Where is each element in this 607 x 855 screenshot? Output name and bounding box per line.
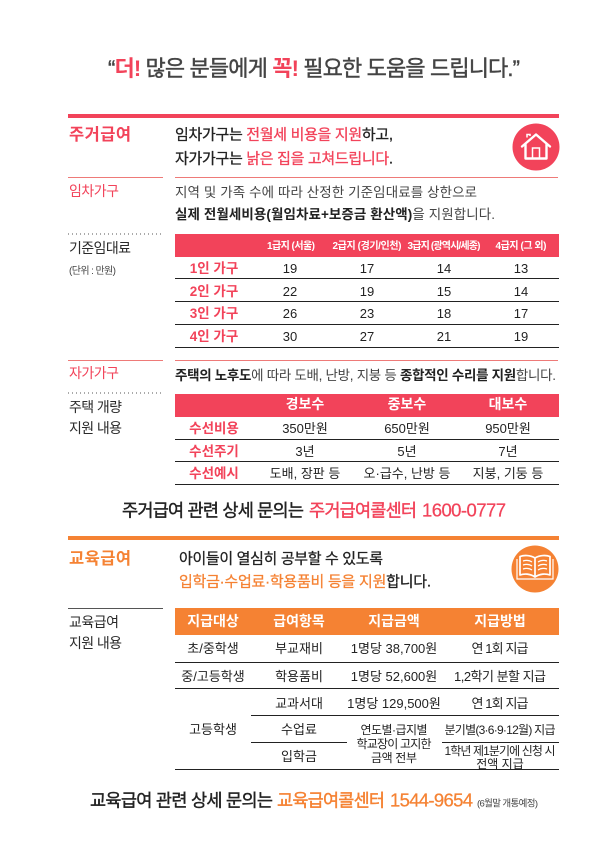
- table: repair support: 경보수: [286, 396, 324, 412]
- label: renter households: 임차가구: [69, 183, 119, 199]
- callout: housing contact: 1600-0777: [422, 500, 506, 520]
- label: education support: 지원 내용: [69, 635, 122, 651]
- table: base rent: 19: [514, 329, 528, 344]
- table: education support: 수업료: [281, 722, 317, 737]
- text block: housing summary: 자가가구는 낡은 집을 고쳐드립니다.: [175, 150, 393, 168]
- table: education support: 교과서대: [275, 696, 323, 711]
- table: education support: 분기별(3·6·9·12월) 지급: [444, 723, 556, 737]
- table: education support: [175, 608, 559, 771]
- table: education support: 지급대상: [187, 613, 239, 629]
- table: base rent: 2인 가구: [190, 284, 238, 299]
- table: base rent: 4급지 (그 외): [496, 240, 546, 252]
- table: base rent: 23: [360, 306, 374, 321]
- label: repair support: 지원 내용: [69, 420, 122, 436]
- table: education support: 연도별·급지별: [360, 723, 428, 737]
- table: base rent: 21: [437, 329, 451, 344]
- table: education support: 1학년 제1분기에 신청 시: [444, 744, 556, 758]
- table: education support: 부교재비: [275, 641, 323, 656]
- table: repair support: [175, 394, 559, 484]
- table: base rent: 14: [437, 261, 451, 276]
- label: repair support: 주택 개량: [69, 399, 122, 415]
- table: base rent: 19: [360, 284, 374, 299]
- table: repair support: 950만원: [485, 421, 531, 436]
- callout: education contact: 교육급여 관련 상세 문의는: [90, 790, 273, 810]
- section bar: education: [68, 536, 559, 540]
- table: repair support: 5년: [397, 444, 417, 459]
- table: education support: 지급방법: [474, 613, 526, 629]
- callout: housing contact: 주거급여콜센터: [309, 500, 417, 520]
- table: education support: 학교장이 고지한: [356, 737, 432, 751]
- callout: education contact: (6월말 개통예정): [477, 798, 538, 810]
- table: education support: 중/고등학생: [181, 669, 245, 684]
- text block: owner description: 주택의 노후도에 따라 도배, 난방, 지붕 등 종합적인 수리를 지원합니다.: [175, 368, 556, 383]
- table: base rent: 26: [283, 306, 297, 321]
- text block: housing summary: [175, 126, 393, 168]
- text block: education summary: 입학금·수업료·학용품비 등을 지원합니다.: [179, 574, 431, 590]
- table: education support: 지급금액: [368, 613, 420, 629]
- table: base rent: 19: [283, 261, 297, 276]
- table: education support: 금액 전부: [371, 751, 417, 765]
- table: base rent: 1인 가구: [190, 261, 238, 276]
- table: base rent: 22: [283, 284, 297, 299]
- table: repair support: 7년: [498, 444, 518, 459]
- table: repair support: 수선주기: [189, 444, 239, 459]
- table: base rent: 18: [437, 306, 451, 321]
- table: base rent: 1급지 (서울): [267, 239, 315, 252]
- table: repair support: 3년: [295, 444, 315, 459]
- table: repair support: 수선비용: [189, 421, 239, 436]
- text block: renter description: [175, 185, 495, 222]
- panel: education benefit: [68, 536, 559, 810]
- label: repair support: [69, 399, 122, 436]
- label: owner households: 자가가구: [69, 365, 119, 381]
- table: base rent: 17: [360, 261, 374, 276]
- table: education support: 입학금: [281, 749, 317, 764]
- table: repair support: 350만원: [282, 421, 328, 436]
- table: education support: 전액 지급: [476, 757, 524, 771]
- table: base rent: 3급지 (광역시/세종): [408, 239, 480, 252]
- label: base rent: (단위 : 만원): [69, 264, 116, 277]
- table: base rent: 17: [514, 306, 528, 321]
- table: base rent: 13: [514, 261, 528, 276]
- label: base rent: [69, 240, 131, 277]
- table: education support: 1명당 52,600원: [351, 669, 437, 684]
- table: repair support: 중보수: [388, 396, 426, 412]
- label: base rent: 기준임대료: [69, 240, 131, 256]
- table: education support: 고등학생: [189, 722, 237, 737]
- table: repair support: 대보수: [489, 396, 527, 412]
- table: repair support: 지붕, 기둥 등: [473, 466, 543, 481]
- table: repair support: 도배, 장판 등: [270, 466, 340, 481]
- table: repair support: 수선예시: [189, 466, 239, 481]
- title: “더! 많은 분들에게 꼭! 필요한 도움을 드립니다.”: [108, 56, 520, 81]
- text block: renter description: 지역 및 가족 수에 따라 산정한 기준임대료를 상한으로: [175, 185, 477, 200]
- table: base rent: 3인 가구: [190, 306, 238, 321]
- table: base rent: 2급지 (경기/인천): [332, 239, 402, 252]
- label: education support: [69, 614, 122, 651]
- table: base rent: 15: [437, 284, 451, 299]
- table: base rent: 30: [283, 329, 297, 344]
- callout: housing contact: 주거급여 관련 상세 문의는: [122, 500, 304, 520]
- callout: education contact: 1544-9654: [390, 790, 473, 810]
- table: repair support: 650만원: [384, 421, 430, 436]
- table: repair support: 오·급수, 난방 등: [364, 466, 450, 481]
- heading: housing benefit: 주거급여: [69, 125, 131, 144]
- text block: education summary: [179, 550, 431, 590]
- table: base rent: 27: [360, 329, 374, 344]
- table: education support: 1명당 38,700원: [351, 641, 437, 656]
- table: base rent: [175, 234, 559, 348]
- table: base rent: 4인 가구: [190, 329, 238, 344]
- table: education support: 1명당 129,500원: [347, 696, 441, 711]
- label: education support: 교육급여: [69, 614, 119, 630]
- table: education support: 학용품비: [275, 669, 323, 684]
- callout: housing contact: [122, 500, 506, 520]
- icon: house: [512, 124, 560, 170]
- heading: education benefit: 교육급여: [69, 549, 131, 568]
- table: education support: 연 1회 지급: [472, 641, 529, 656]
- text block: renter description: 실제 전월세비용(월임차료+보증금 환산액)을 지원합니다.: [175, 206, 495, 222]
- table: education support: 급여항목: [273, 613, 325, 629]
- section bar: housing: [68, 114, 559, 118]
- table: base rent: 14: [514, 284, 528, 299]
- callout: education contact: 교육급여콜센터: [277, 790, 385, 810]
- table: education support: 연 1회 지급: [472, 696, 529, 711]
- table: education support: 1,2학기 분할 지급: [454, 669, 546, 684]
- callout: education contact: [90, 790, 538, 810]
- icon: book: [512, 546, 558, 592]
- table: education support: 초/중학생: [187, 641, 239, 656]
- panel: housing benefit: [68, 114, 560, 520]
- text block: education summary: 아이들이 열심히 공부할 수 있도록: [179, 550, 383, 568]
- text block: housing summary: 임차가구는 전월세 비용을 지원하고,: [175, 126, 393, 144]
